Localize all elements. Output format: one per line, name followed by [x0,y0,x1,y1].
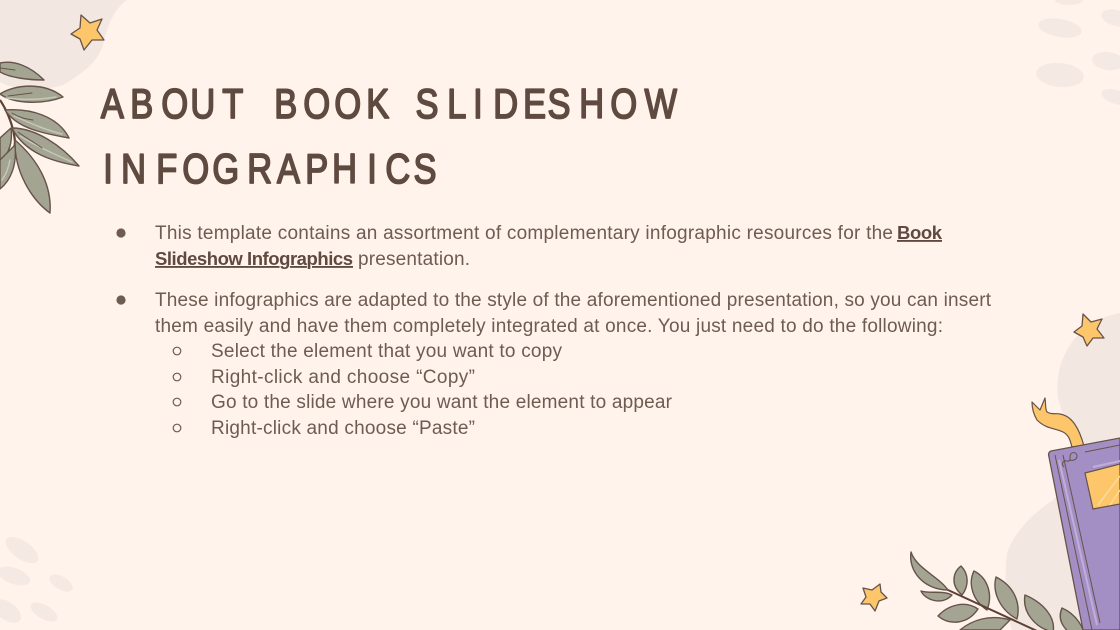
text block: second bullet [116,290,992,337]
blob: top left [0,0,127,89]
list: steps: Select the element that you want to copy [211,341,562,362]
icon: leaf branch top left [0,62,79,213]
text block: first bullet: Book [897,222,943,243]
icon: star right [1074,314,1104,346]
icon: bookmark ribbon [1032,398,1084,447]
blob: right side [1006,313,1120,630]
list: steps: Right-click and choose “Paste” [211,418,475,439]
list: steps: Go to the slide where you want the element to appear [211,392,673,413]
list: steps: Right-click and choose “Copy” [211,367,475,388]
text block: first bullet [116,222,943,270]
text block: second bullet: These infographics are adapted to the style of the aforementioned presentation, so you can insert [155,290,992,311]
icon: star top left [71,15,104,50]
title: INFOGRAPHICS [103,146,436,193]
title [101,81,678,193]
text block: second bullet: them easily and have them completely integrated at once. You just need to do the following: [155,316,943,337]
spots: top right [1035,0,1120,108]
spots: bottom left [0,532,76,628]
list: steps [173,341,673,439]
title: ABOUT BOOK SLIDESHOW [101,81,678,128]
text block: first bullet: presentation. [358,249,470,270]
text block: first bullet: This template contains an assortment of complementary infographic resources for the [155,223,893,244]
icon: star bottom [861,584,887,611]
icon: purple book [1049,438,1120,630]
icon: leaf branch bottom right [911,552,1085,630]
text block: first bullet: Slideshow Infographics [155,248,353,269]
